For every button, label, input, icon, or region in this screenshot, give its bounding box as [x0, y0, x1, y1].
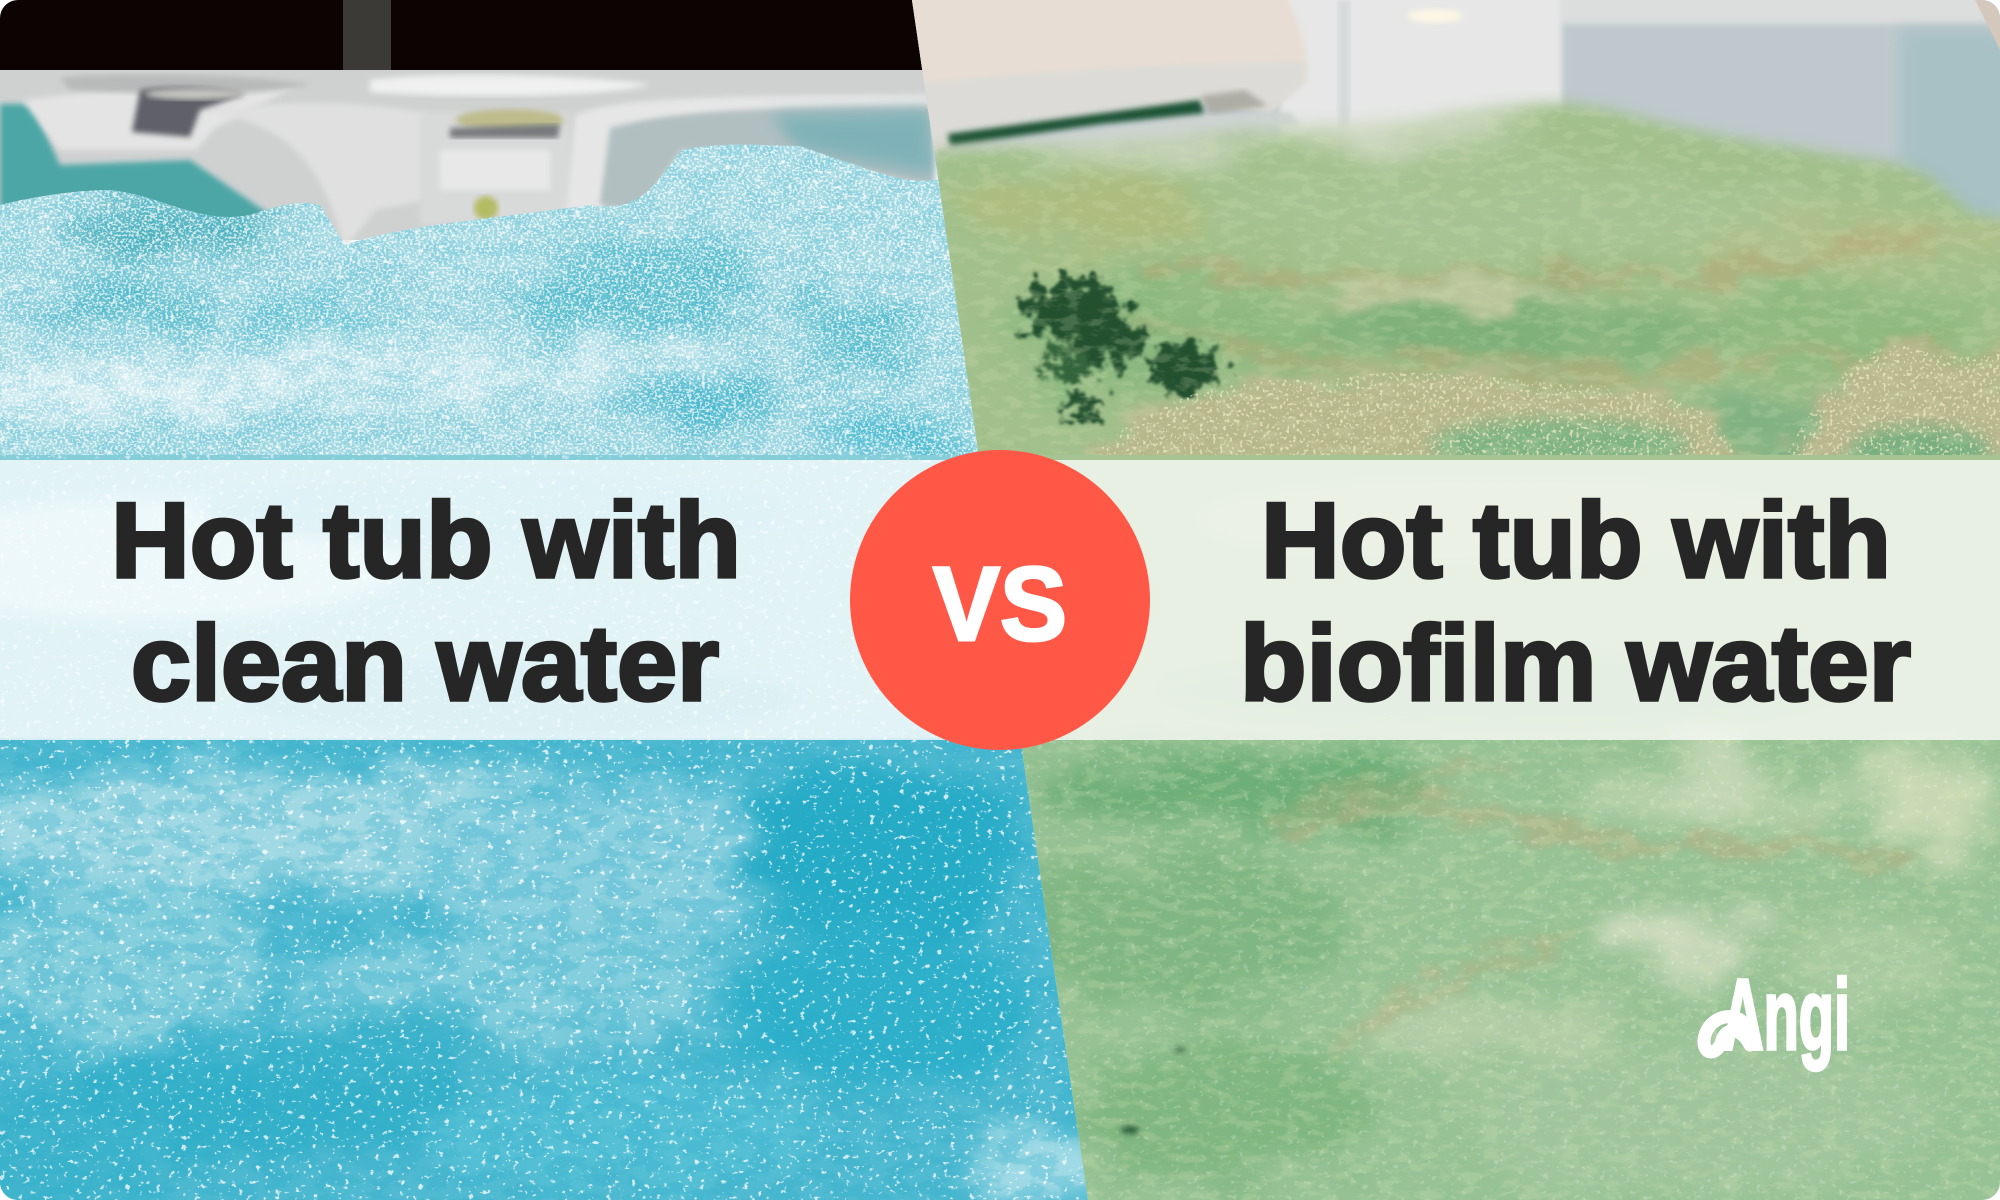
translucent band left — [0, 460, 1000, 740]
tub wall — [900, 0, 2000, 240]
vs badge: VS — [933, 546, 1067, 663]
translucent band right — [1000, 460, 2000, 740]
panel: biofilm water photo — [900, 0, 2000, 1200]
heading: biofilm water: Hot tub with — [1261, 480, 1891, 600]
heading: clean water — [111, 480, 741, 723]
water above band — [900, 90, 2000, 474]
dark background above the tub — [0, 0, 930, 72]
white pipe — [900, 0, 1307, 160]
green strip on pipe — [944, 88, 1297, 149]
vs badge — [850, 450, 1150, 750]
water behind band — [1059, 455, 2000, 738]
dark green algae patch — [1025, 278, 1219, 414]
dark specks — [1121, 1048, 1186, 1134]
logo: Angi: Angi — [1722, 959, 1850, 1071]
heading: clean water: clean water — [131, 603, 719, 723]
heading: clean water: Hot tub with — [111, 480, 741, 600]
heading: biofilm water — [1240, 480, 1911, 723]
water below band — [0, 738, 1110, 1200]
water above band — [0, 144, 978, 455]
water behind band — [0, 455, 1040, 745]
panel: clean water photo — [0, 0, 1110, 1200]
tub rim and headrest — [0, 70, 938, 245]
jet left — [132, 87, 245, 137]
jet right — [440, 109, 564, 220]
logo: Angi — [1704, 959, 1850, 1071]
heading: biofilm water: biofilm water — [1240, 603, 1911, 723]
water below band — [1022, 738, 2000, 1200]
